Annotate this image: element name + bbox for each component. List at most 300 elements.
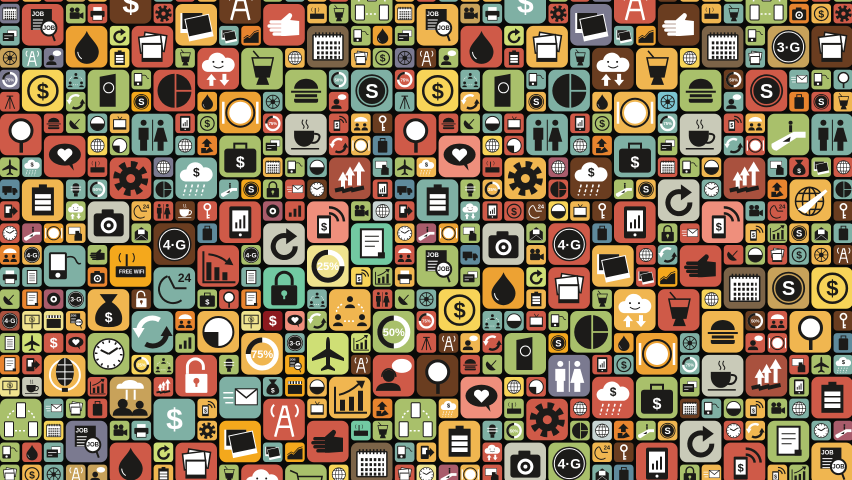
hand bbox=[307, 421, 349, 462]
exit bbox=[22, 355, 42, 374]
printer bbox=[88, 4, 107, 23]
clock bbox=[724, 421, 743, 440]
router bbox=[483, 157, 502, 177]
video bbox=[768, 399, 787, 418]
dollar: $ bbox=[166, 404, 183, 437]
gear bbox=[526, 399, 568, 440]
coin bbox=[548, 333, 568, 353]
phone bbox=[197, 399, 217, 418]
dollar: $ bbox=[269, 313, 277, 329]
photos bbox=[351, 48, 371, 68]
coin: $ bbox=[599, 119, 605, 130]
clock bbox=[88, 333, 129, 375]
4G: 4·G bbox=[163, 236, 186, 252]
drop bbox=[373, 26, 392, 46]
document bbox=[351, 223, 392, 265]
mail money bbox=[811, 223, 831, 243]
cloud bbox=[460, 201, 480, 221]
camera bbox=[482, 223, 524, 265]
printer bbox=[483, 4, 502, 23]
card bbox=[0, 26, 20, 46]
coin: S bbox=[665, 425, 671, 436]
job bbox=[417, 4, 458, 46]
coin bbox=[417, 70, 458, 111]
dish bbox=[460, 114, 480, 133]
phone bbox=[834, 223, 852, 243]
restroom bbox=[526, 114, 568, 155]
24 clock: 24 bbox=[538, 204, 545, 210]
phone bbox=[351, 267, 371, 287]
ring bbox=[680, 355, 700, 374]
coin bbox=[592, 114, 612, 133]
compass bbox=[417, 289, 436, 309]
escalator bbox=[834, 421, 852, 440]
escalator bbox=[636, 421, 656, 440]
3G: 3·G bbox=[70, 297, 81, 304]
job: JOB bbox=[438, 267, 451, 273]
card bbox=[44, 442, 63, 462]
chart bbox=[285, 442, 305, 462]
tower bbox=[834, 245, 852, 265]
drink bbox=[175, 48, 195, 68]
job: JOB bbox=[295, 364, 301, 368]
network bbox=[66, 70, 86, 89]
coffee bbox=[680, 114, 721, 155]
arrows bbox=[724, 158, 765, 199]
globe bbox=[329, 465, 348, 480]
gauge bbox=[504, 311, 524, 331]
job bbox=[22, 4, 63, 46]
router bbox=[351, 421, 371, 440]
job bbox=[811, 443, 852, 480]
drop bbox=[614, 333, 634, 353]
chart bbox=[351, 333, 371, 353]
job: JOB bbox=[290, 357, 296, 361]
clock pie bbox=[504, 136, 524, 155]
globe bbox=[504, 377, 524, 397]
tripod bbox=[0, 92, 20, 111]
hydrant bbox=[460, 180, 480, 199]
tripod bbox=[417, 333, 436, 353]
job bbox=[417, 245, 458, 287]
doc bbox=[0, 355, 20, 374]
escalator bbox=[22, 223, 42, 243]
24 clock bbox=[768, 201, 787, 221]
tablet bbox=[483, 201, 502, 221]
job bbox=[285, 355, 305, 374]
coin: S bbox=[365, 81, 379, 103]
coin: S bbox=[533, 96, 539, 107]
mail bbox=[219, 377, 261, 418]
hand card bbox=[483, 465, 502, 480]
rain cloud bbox=[592, 377, 634, 418]
sign bbox=[0, 377, 20, 397]
recycle bbox=[483, 333, 502, 353]
briefcase: $ bbox=[236, 155, 245, 172]
coffee bbox=[22, 377, 42, 397]
globe balloon bbox=[44, 355, 86, 396]
doc bbox=[241, 289, 261, 309]
document bbox=[768, 421, 809, 462]
person bbox=[745, 333, 765, 353]
pie bbox=[548, 70, 590, 111]
globe bbox=[570, 399, 590, 418]
coin: $ bbox=[621, 360, 627, 371]
sign: $ bbox=[30, 317, 34, 323]
globe bbox=[570, 136, 590, 155]
phone wifi bbox=[724, 443, 765, 480]
clock pie bbox=[110, 136, 129, 155]
job: JOB bbox=[32, 12, 45, 18]
ring: 75% bbox=[686, 362, 694, 367]
tv bbox=[570, 201, 590, 221]
exit bbox=[417, 442, 436, 462]
globe bbox=[285, 48, 305, 68]
24 clock: 24 bbox=[604, 446, 611, 452]
phone bbox=[768, 465, 787, 480]
gear bbox=[834, 4, 852, 23]
sign bbox=[241, 311, 261, 331]
hand card bbox=[66, 223, 86, 243]
gauge bbox=[724, 399, 743, 418]
open lock bbox=[175, 355, 217, 396]
camera bbox=[88, 267, 107, 287]
coin: S bbox=[643, 184, 649, 195]
pie bbox=[570, 421, 590, 440]
doc bbox=[22, 289, 42, 309]
tablet bbox=[636, 443, 678, 480]
24 clock bbox=[592, 442, 612, 462]
refresh bbox=[504, 26, 524, 46]
magnifier bbox=[417, 355, 458, 396]
phone bbox=[592, 223, 612, 243]
4G: 4·G bbox=[246, 252, 257, 259]
coffee bbox=[285, 114, 327, 155]
4G bbox=[0, 311, 20, 331]
mp3 bbox=[351, 26, 371, 46]
calendar bbox=[263, 157, 283, 177]
magnifier bbox=[219, 289, 239, 309]
globe bbox=[88, 136, 107, 155]
plate bbox=[219, 92, 261, 133]
ring bbox=[658, 114, 677, 133]
arrows bbox=[592, 136, 612, 155]
top edge tiles bbox=[0, 0, 852, 2]
job: JOB bbox=[87, 443, 100, 449]
job: JOB bbox=[43, 26, 56, 32]
plane bbox=[811, 355, 831, 374]
coin bbox=[658, 421, 677, 440]
phone wifi bbox=[307, 201, 349, 243]
tv bbox=[110, 114, 129, 133]
mp3 player bbox=[44, 245, 86, 287]
restroom bbox=[811, 114, 852, 155]
sign: $ bbox=[8, 383, 12, 389]
cloud bbox=[241, 464, 283, 480]
people bbox=[745, 114, 765, 133]
phone wifi: $ bbox=[738, 463, 744, 475]
dish bbox=[0, 289, 20, 309]
notebook bbox=[241, 267, 261, 287]
gauge bbox=[88, 114, 107, 133]
plane bbox=[22, 333, 42, 353]
phone bbox=[724, 114, 743, 133]
ring bbox=[417, 311, 436, 331]
job: JOB bbox=[76, 429, 89, 435]
4G bbox=[154, 223, 195, 265]
bag bbox=[789, 157, 809, 177]
restroom bbox=[132, 114, 173, 155]
coin: $ bbox=[204, 119, 210, 130]
hand bbox=[658, 4, 700, 46]
rain cloud bbox=[834, 355, 852, 374]
card bbox=[680, 377, 700, 397]
photos bbox=[570, 4, 612, 46]
clock pie bbox=[197, 311, 239, 353]
bag: $ bbox=[797, 168, 801, 175]
photos bbox=[548, 267, 590, 309]
coin: S bbox=[818, 96, 824, 107]
cloud people bbox=[110, 377, 151, 418]
people bbox=[351, 114, 371, 133]
4G bbox=[22, 245, 42, 265]
battery bbox=[154, 465, 173, 480]
lock bbox=[263, 267, 305, 309]
escalator bbox=[768, 114, 809, 155]
arrows bbox=[329, 158, 371, 199]
globe bbox=[592, 421, 612, 440]
phone: $ bbox=[730, 123, 733, 129]
phone bbox=[197, 223, 217, 243]
rain cloud bbox=[439, 399, 458, 418]
dollar bbox=[504, 0, 546, 24]
key bbox=[197, 201, 217, 221]
gauge bbox=[307, 377, 327, 397]
tower bbox=[439, 333, 458, 353]
plate bbox=[439, 223, 458, 243]
ring bbox=[483, 180, 502, 199]
drink bbox=[570, 48, 590, 68]
key bbox=[373, 114, 392, 133]
ring bbox=[0, 70, 20, 89]
coin bbox=[614, 355, 634, 374]
rain cloud: $ bbox=[447, 404, 451, 410]
tower bbox=[614, 0, 656, 24]
4G: 4·G bbox=[558, 456, 581, 472]
drop bbox=[22, 442, 42, 462]
globe bbox=[175, 136, 195, 155]
pie bbox=[548, 180, 568, 199]
compass bbox=[811, 245, 831, 265]
gauge bbox=[307, 157, 327, 177]
mp3 bbox=[285, 157, 305, 177]
hand bbox=[680, 245, 721, 287]
key bbox=[834, 311, 852, 331]
video bbox=[66, 4, 86, 23]
gear bbox=[154, 4, 173, 23]
coin bbox=[811, 4, 831, 23]
ring: 75% bbox=[269, 121, 277, 126]
tablet bbox=[175, 114, 195, 133]
tower bbox=[351, 355, 371, 374]
key bbox=[614, 442, 634, 462]
arrows bbox=[768, 180, 787, 199]
people bbox=[175, 311, 195, 331]
gauge bbox=[548, 201, 568, 221]
tablet bbox=[373, 180, 392, 199]
burger bbox=[680, 70, 721, 111]
job bbox=[66, 421, 107, 462]
24 clock bbox=[131, 201, 151, 221]
calendar bbox=[351, 443, 392, 480]
battery bbox=[22, 179, 63, 221]
compass bbox=[44, 465, 63, 480]
plate bbox=[44, 223, 63, 243]
chart bbox=[373, 267, 392, 287]
card bbox=[460, 267, 480, 287]
compass bbox=[0, 48, 20, 68]
job bbox=[66, 311, 86, 331]
coin: $ bbox=[826, 276, 839, 301]
ring bbox=[745, 311, 765, 331]
gauge bbox=[483, 114, 502, 133]
coin bbox=[636, 180, 656, 199]
recycle bbox=[658, 245, 677, 265]
rain cloud: $ bbox=[425, 162, 429, 168]
tv bbox=[307, 399, 327, 418]
card bbox=[263, 136, 283, 155]
ring: 75% bbox=[663, 121, 672, 126]
recycle bbox=[66, 92, 86, 111]
tablet bbox=[789, 377, 809, 397]
3G bbox=[66, 289, 86, 309]
ring: 75% bbox=[6, 77, 14, 82]
drink bbox=[658, 289, 700, 331]
ring: 50% bbox=[335, 77, 343, 82]
tripod bbox=[395, 92, 414, 111]
hand card bbox=[768, 157, 787, 177]
coin: S bbox=[796, 228, 802, 239]
bag: $ bbox=[271, 388, 275, 395]
phones bbox=[0, 399, 42, 440]
coin bbox=[789, 245, 809, 265]
people bbox=[768, 311, 787, 331]
plate bbox=[745, 136, 765, 155]
mp3 bbox=[548, 311, 568, 331]
3G: 3·G bbox=[777, 39, 800, 55]
calendar bbox=[724, 267, 765, 309]
truck bbox=[460, 245, 480, 265]
person bbox=[88, 465, 107, 480]
phone: $ bbox=[752, 408, 755, 414]
drink bbox=[329, 4, 348, 23]
job: JOB bbox=[438, 26, 451, 32]
menu bbox=[504, 333, 546, 375]
card bbox=[658, 136, 677, 155]
compass bbox=[658, 92, 677, 111]
tablet bbox=[614, 201, 656, 243]
network bbox=[483, 311, 502, 331]
coin: S bbox=[760, 81, 773, 103]
24 clock bbox=[154, 267, 195, 309]
drink bbox=[636, 48, 678, 90]
restroom bbox=[154, 201, 173, 221]
coffee bbox=[175, 201, 195, 221]
coin bbox=[746, 70, 787, 111]
photos bbox=[0, 465, 20, 480]
photos bbox=[768, 245, 787, 265]
coin bbox=[811, 267, 852, 309]
printer bbox=[395, 267, 414, 287]
tower bbox=[263, 399, 305, 440]
ring: 75% bbox=[422, 319, 431, 324]
ring: 25% bbox=[488, 187, 497, 192]
75 percent ring: 75% bbox=[251, 349, 273, 361]
tower bbox=[417, 48, 436, 68]
3G: 3·G bbox=[289, 340, 300, 347]
cd bbox=[263, 201, 283, 221]
globe bbox=[636, 245, 656, 265]
lock bbox=[263, 180, 283, 199]
luggage bbox=[789, 92, 809, 111]
video bbox=[745, 201, 765, 221]
dish bbox=[724, 245, 743, 265]
mail bbox=[789, 70, 809, 89]
job: JOB bbox=[427, 253, 440, 259]
luggage bbox=[88, 399, 107, 418]
job: JOB bbox=[832, 465, 845, 471]
hand bbox=[263, 4, 305, 46]
free wifi router bbox=[110, 245, 151, 287]
pie bbox=[154, 70, 195, 111]
escalator bbox=[614, 180, 634, 199]
hydrant bbox=[66, 180, 86, 199]
dollar bbox=[154, 399, 195, 440]
plane bbox=[307, 333, 349, 375]
chart bbox=[88, 377, 107, 397]
cloud bbox=[483, 442, 502, 462]
battery bbox=[110, 48, 129, 68]
refresh bbox=[658, 179, 700, 221]
truck bbox=[395, 180, 414, 199]
calendar bbox=[702, 26, 743, 67]
photos bbox=[395, 465, 414, 480]
job: JOB bbox=[427, 12, 440, 18]
ring: 50% bbox=[751, 319, 760, 324]
clapper bbox=[44, 311, 63, 331]
battery bbox=[504, 48, 524, 68]
dollar: $ bbox=[50, 335, 58, 351]
briefcase: $ bbox=[631, 155, 640, 172]
job: JOB bbox=[71, 314, 76, 318]
battery bbox=[439, 421, 480, 462]
coin bbox=[526, 92, 546, 111]
phone bbox=[329, 114, 348, 133]
network bbox=[329, 289, 371, 331]
gear bbox=[504, 158, 546, 199]
ring bbox=[263, 114, 283, 133]
mp3 bbox=[526, 70, 546, 89]
mail bbox=[44, 399, 63, 418]
plate bbox=[460, 465, 480, 480]
cloud bbox=[592, 48, 634, 90]
coin: $ bbox=[380, 54, 386, 65]
photos bbox=[526, 26, 568, 67]
refresh bbox=[263, 223, 305, 265]
photo bbox=[614, 26, 634, 46]
burger bbox=[460, 355, 480, 374]
tower bbox=[66, 465, 86, 480]
